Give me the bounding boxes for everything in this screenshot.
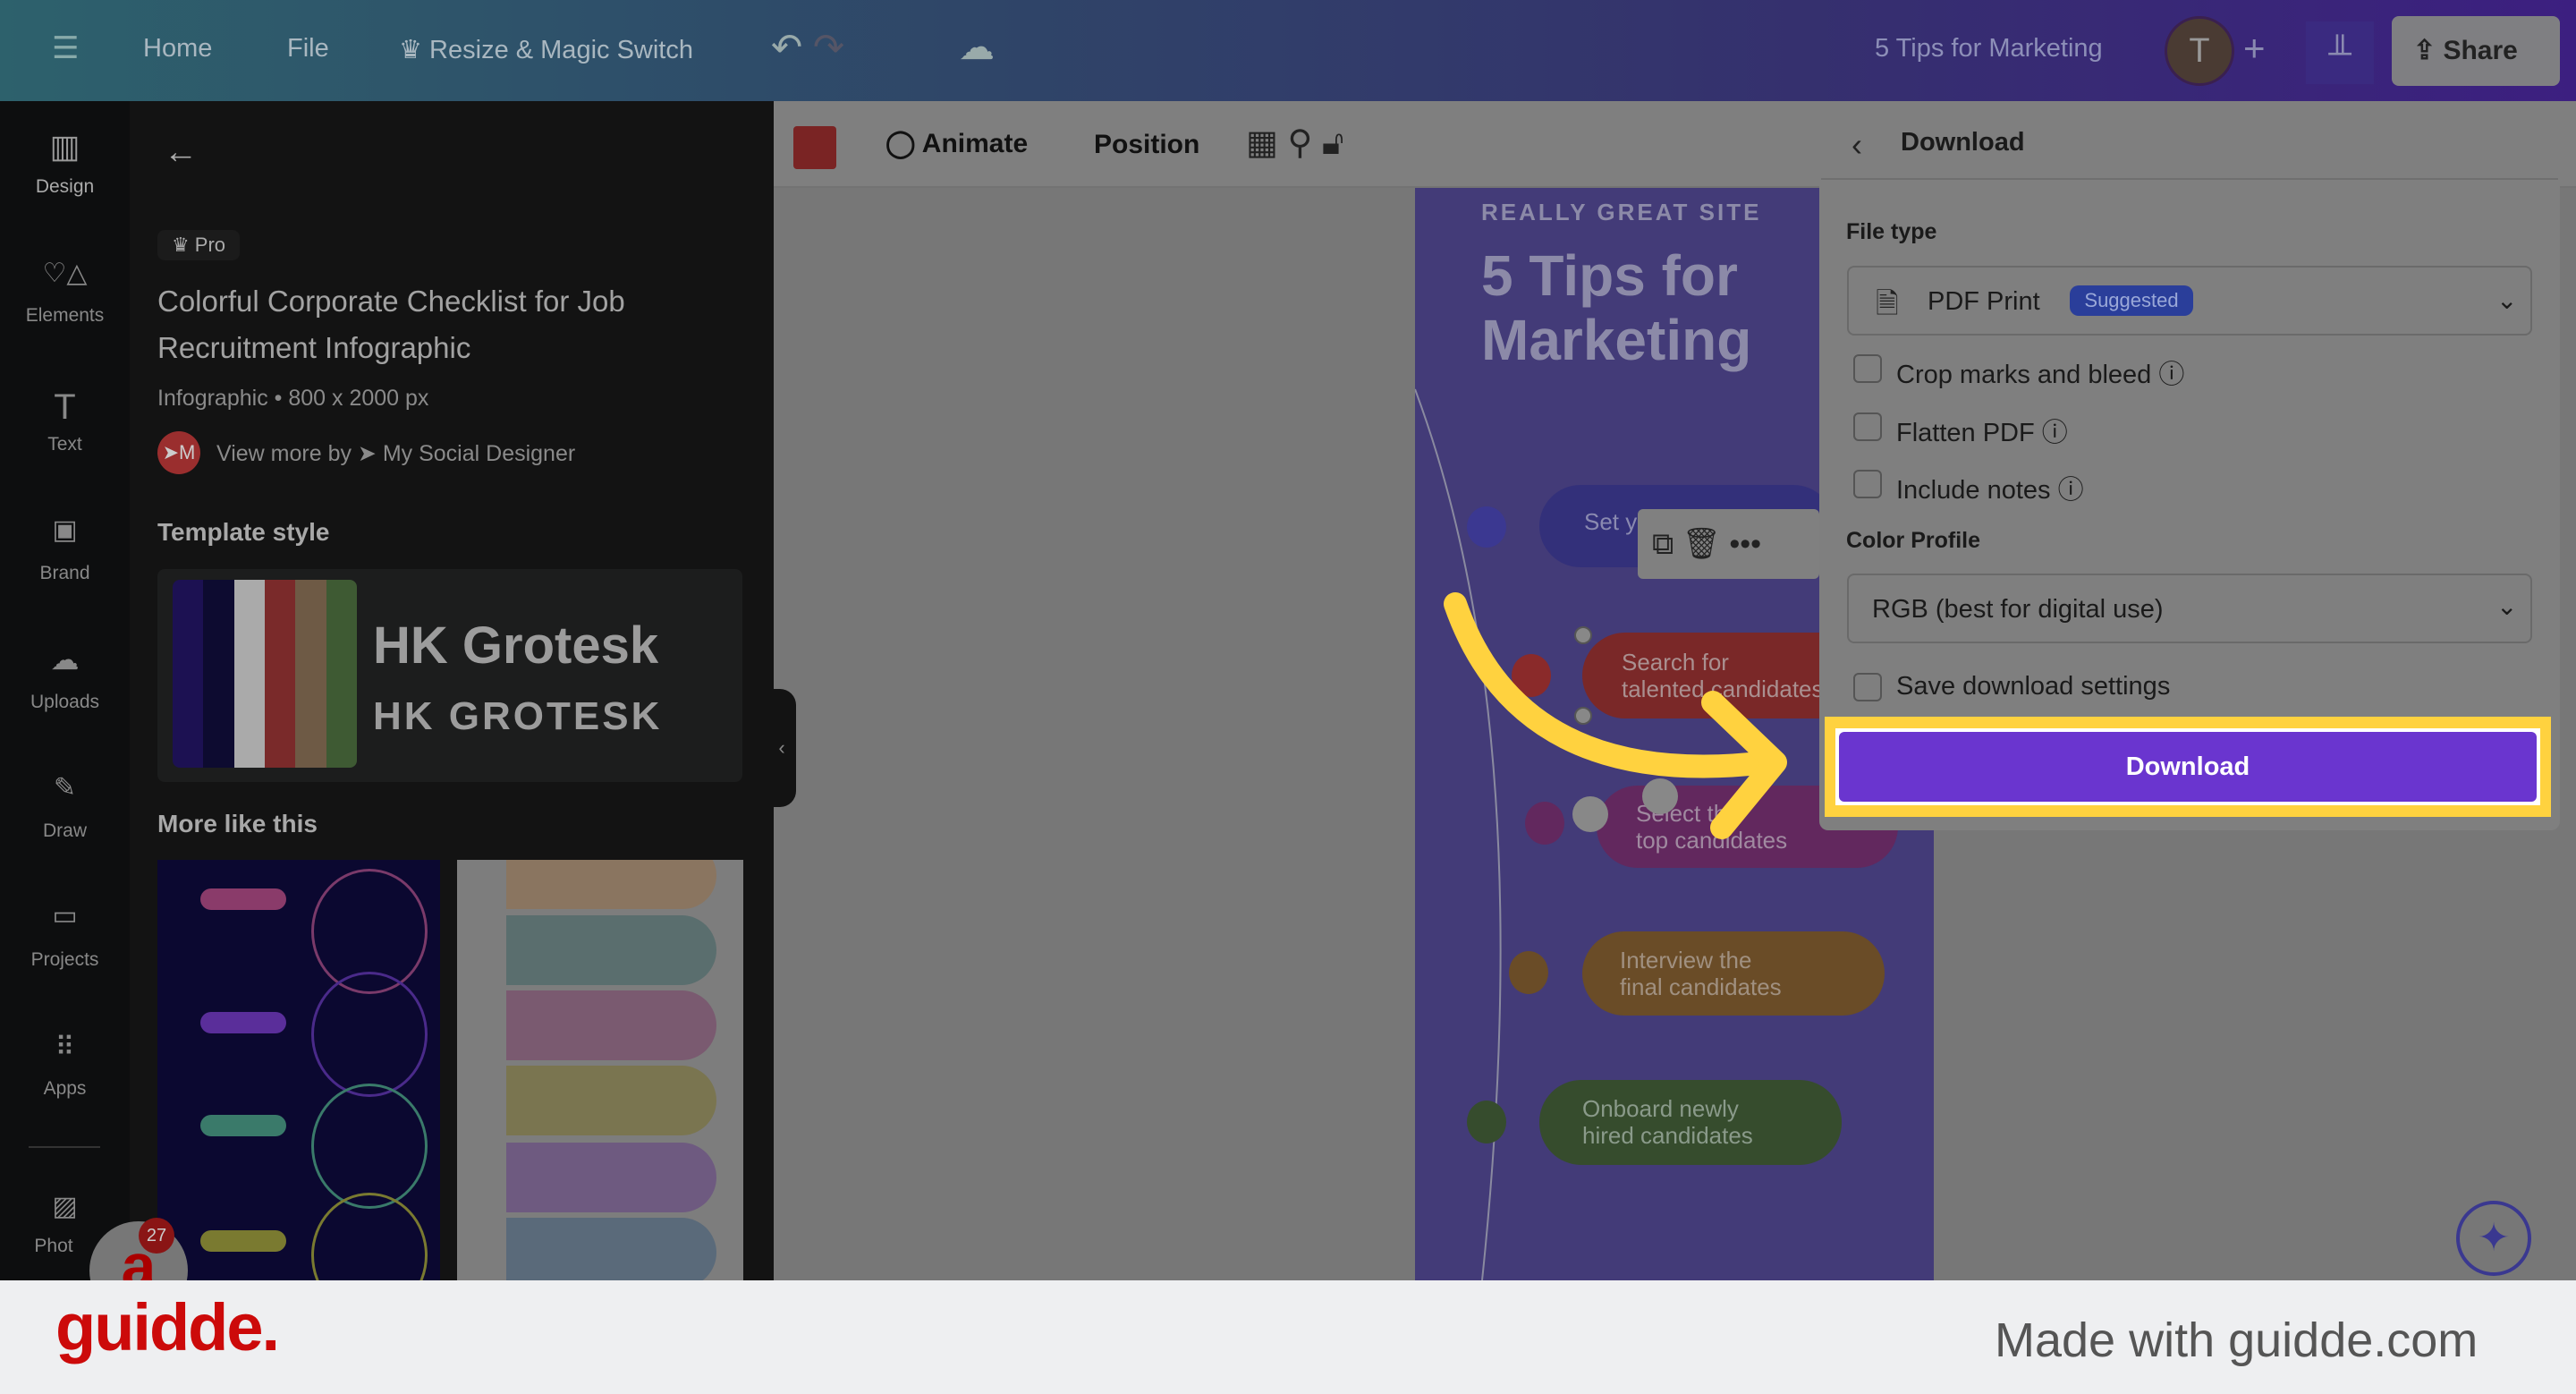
- icon rail: Text: [47, 434, 82, 455]
- highlighted download button: Download: [2126, 752, 2250, 781]
- color profile select: RGB (best for digital use): [1872, 595, 2164, 624]
- collapse tab: ‹: [778, 736, 785, 759]
- icon rail: Design: [36, 176, 94, 197]
- author: ➤M: [163, 441, 195, 463]
- more like this heading: More like this: [157, 810, 318, 837]
- stats icon: ╨: [2328, 34, 2351, 71]
- template style card: HK GROTESK: [373, 694, 662, 738]
- side panel: [130, 101, 774, 1280]
- icon rail: ⠿: [55, 1033, 74, 1062]
- checkbox: save settings: Save download settings: [1896, 672, 2170, 701]
- template style heading: Template style: [157, 518, 329, 546]
- step 2: talented candidates: [1622, 676, 1824, 702]
- checkbox: crop marks: Crop marks and bleed ⓘ: [1896, 361, 2184, 389]
- magic sparkle button: [2456, 1201, 2531, 1276]
- file type select: 🗎︎: [1876, 287, 1899, 319]
- icon rail: Brand: [39, 563, 90, 583]
- icon rail: [0, 101, 130, 1280]
- avatar: [2165, 16, 2234, 86]
- step 5: [1539, 1080, 1842, 1165]
- magic sparkle button: ✦: [2478, 1216, 2510, 1260]
- floating context toolbar: [1638, 509, 1819, 579]
- file type select: Suggested: [2084, 289, 2179, 311]
- floating context toolbar: ⧉ 🗑︎ •••: [1652, 527, 1761, 561]
- side panel: 27: [147, 1226, 166, 1245]
- step 1: [1539, 485, 1835, 567]
- icon rail: Projects: [31, 949, 98, 970]
- card 1: [157, 860, 440, 1280]
- subtitle: REALLY GREAT SITE: [1481, 199, 1761, 225]
- step 2: [1582, 633, 1877, 718]
- stats icon: [2306, 21, 2374, 84]
- checkbox: notes: Include notes ⓘ: [1896, 476, 2084, 505]
- icon rail: ▨: [52, 1192, 78, 1221]
- pro badge: ♛ Pro: [172, 234, 225, 256]
- highlighted download button: [1825, 717, 2551, 817]
- template title: Recruitment Infographic: [157, 331, 470, 364]
- made with: Made with guidde.com: [1995, 1313, 2478, 1367]
- step 3: top candidates: [1636, 827, 1787, 854]
- file type select: PDF Print: [1928, 287, 2040, 316]
- template style card: [157, 569, 742, 782]
- footer: [0, 1280, 2576, 1394]
- file type select: ⌄: [2496, 286, 2517, 314]
- file type select: [1847, 266, 2532, 336]
- doc title: 5 Tips for Marketing: [1875, 34, 2103, 63]
- icon rail: ✎: [54, 773, 76, 803]
- share button: [2392, 16, 2560, 86]
- timeline curve: [1415, 388, 1502, 1280]
- author: View more by ➤ My Social Designer: [216, 441, 575, 466]
- pro badge: [157, 230, 240, 260]
- template title: Colorful Corporate Checklist for Job: [157, 285, 625, 318]
- step 2: Search for: [1622, 649, 1729, 676]
- meta: Infographic • 800 x 2000 px: [157, 386, 428, 411]
- step 3: [1597, 786, 1898, 868]
- download panel: Download: [1901, 128, 2025, 157]
- guidde logo: guidde.: [55, 1290, 278, 1364]
- download panel: [1819, 101, 2560, 830]
- checkbox: flatten: Flatten PDF ⓘ: [1896, 419, 2068, 447]
- editor toolbar: ◯ Animate: [886, 129, 1028, 158]
- menu icon: ☰: [52, 31, 79, 65]
- plus: +: [2243, 27, 2266, 69]
- icon rail: Phot: [34, 1236, 73, 1256]
- card 2: [457, 860, 743, 1280]
- cloud icon: ☁: [959, 28, 995, 67]
- template style card: HK Grotesk: [373, 616, 658, 675]
- checkbox: flatten: [1853, 412, 2068, 447]
- color profile select: [1847, 574, 2532, 643]
- top bar: [0, 0, 2576, 101]
- checkbox: notes: [1853, 470, 2084, 505]
- color profile select: ⌄: [2496, 592, 2517, 620]
- panel header: ‹: [1852, 126, 1862, 163]
- step 4: [1582, 931, 1885, 1016]
- editor toolbar: Position: [1094, 130, 1199, 159]
- step 3: Select the: [1636, 800, 1740, 827]
- step 5: hired candidates: [1582, 1122, 1753, 1149]
- back arrow: ←: [164, 133, 198, 171]
- step 5: Onboard newly: [1582, 1095, 1739, 1122]
- author: [157, 431, 575, 474]
- editor toolbar: [774, 101, 2576, 188]
- heading: [1481, 243, 1751, 372]
- design canvas: [1415, 188, 1934, 1280]
- color profile label: Color Profile: [1846, 528, 1980, 553]
- undo redo icons: ↶ ↷: [771, 26, 844, 68]
- guidde badge: a: [122, 1231, 156, 1301]
- icon rail: Draw: [43, 820, 87, 841]
- nav: home: Home: [143, 34, 212, 63]
- heading: 5 Tips for: [1481, 243, 1738, 308]
- guidde badge: [89, 1221, 188, 1320]
- nav: file: File: [287, 34, 329, 63]
- icon rail: ▥: [49, 128, 80, 165]
- icon rail: ♡△: [43, 259, 87, 288]
- heading: Marketing: [1481, 308, 1751, 372]
- icon rail: Uploads: [30, 692, 99, 712]
- icon rail: ▭: [52, 901, 78, 931]
- template title: [157, 285, 625, 364]
- nav: resize: ♛ Resize & Magic Switch: [399, 36, 693, 64]
- collapse tab: [767, 689, 796, 807]
- share button: ⇪ Share: [2413, 36, 2518, 65]
- editor toolbar: ▦ ⚲ 🔓︎: [1246, 124, 1343, 162]
- step 1: Set y: [1584, 508, 1637, 535]
- file type label: File type: [1846, 219, 1936, 244]
- icon rail: Apps: [44, 1078, 86, 1099]
- icon rail: T: [54, 387, 76, 427]
- step 4: Interview the: [1620, 947, 1751, 973]
- icon rail: ▣: [52, 515, 78, 545]
- icon rail: Elements: [26, 305, 104, 326]
- icon rail: ☁: [50, 643, 79, 676]
- selection handles: [1574, 626, 1592, 644]
- step 4: final candidates: [1620, 973, 1782, 1000]
- avatar: T: [2189, 32, 2210, 70]
